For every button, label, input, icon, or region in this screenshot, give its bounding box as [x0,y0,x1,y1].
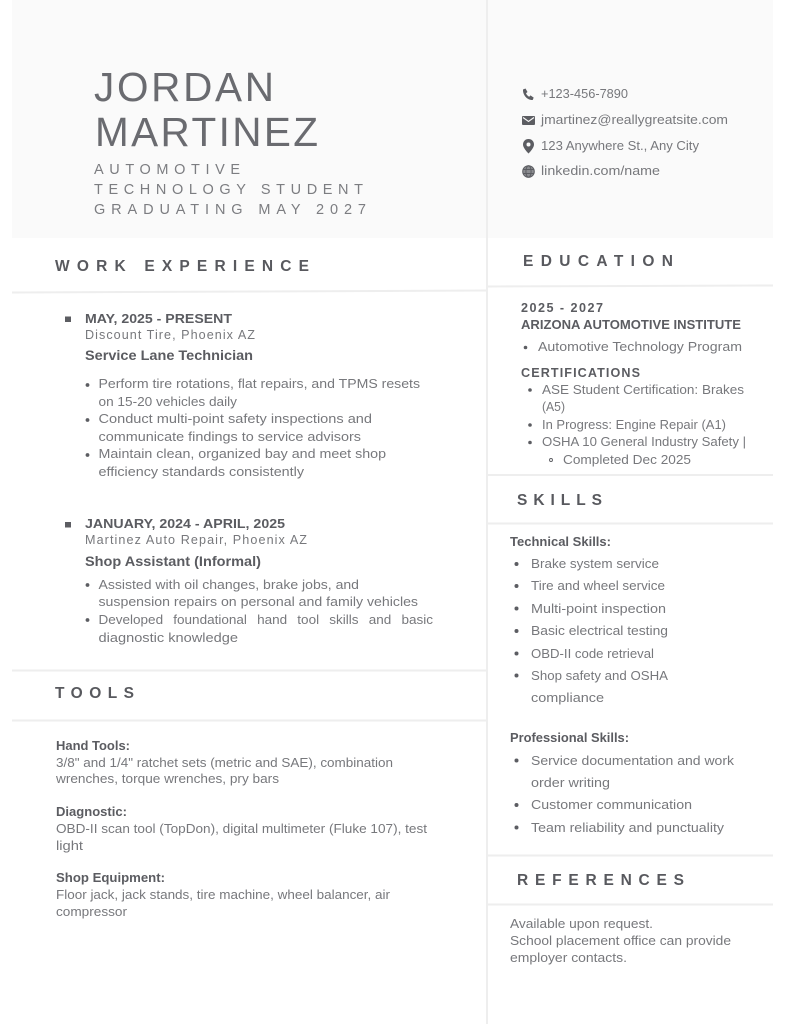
job 1 duties: efficiency standards consistently [98,465,305,479]
heading: tools: TOOLS [55,685,134,702]
shop equipment: Shop Equipment: [56,871,165,885]
subtitle: GRADUATING MAY 2027 [94,202,366,218]
technical skills: Basic electrical testing [531,624,668,638]
icon: globe [523,166,534,177]
technical skills: Shop safety and OSHA [531,669,669,683]
panel: contact [522,86,728,178]
certifications: Completed Dec 2025 [563,453,691,467]
professional skills: Customer communication [531,798,692,812]
hand tools: wrenches, torque wrenches, pry bars [55,772,279,786]
job 1 duties: Perform tire rotations, flat repairs, and TPMS resets [98,377,420,391]
shop equipment [56,871,390,919]
technical skills: OBD-II code retrieval [531,647,654,661]
icon: phone [523,88,534,100]
contact: phone number: +123-456-7890 [541,86,628,101]
icon: mail [522,116,535,125]
hand tools: Hand Tools: [56,739,130,753]
certifications: CERTIFICATIONS [521,366,640,380]
panel: references: Available upon request. [510,917,653,931]
technical skills: Multi-point inspection [531,602,666,616]
job 1 role: Service Lane Technician [85,348,253,363]
job 2 duties [86,578,433,645]
technical skills [510,535,669,705]
diagnostic tools: Diagnostic: [56,805,127,819]
subtitle: TECHNOLOGY STUDENT [94,182,363,198]
title: name [94,64,318,155]
panel: job 2 [65,517,433,645]
job 1 duties: communicate findings to service advisors [98,430,361,444]
job 2 role: Shop Assistant (Informal) [85,554,261,569]
certifications: OSHA 10 General Industry Safety | [542,435,746,449]
diagnostic tools: light [56,839,84,853]
panel: tools [55,739,428,919]
subtitle [94,162,366,218]
diagnostic tools: OBD-II scan tool (TopDon), digital multimeter (Fluke 107), test [56,822,428,836]
hand tools [55,739,393,786]
panel: references: employer contacts. [510,951,627,965]
job 2 dates: JANUARY, 2024 - APRIL, 2025 [85,517,285,531]
panel: references: School placement office can provide [510,934,731,948]
contact: website: linkedin.com/name [541,163,660,178]
technical skills: Tire and wheel service [531,579,665,593]
professional skills: Professional Skills: [510,731,629,745]
job 1 duties [86,377,420,479]
icon: location pin [523,139,534,154]
certifications [521,366,746,467]
job 1 dates: MAY, 2025 - PRESENT [85,312,232,326]
school: 2025 - 2027 [521,301,603,315]
technical skills: Brake system service [531,557,659,571]
contact: email: jmartinez@reallygreatsite.com [540,112,728,127]
panel: skills [510,535,735,835]
job 1 duties: Maintain clean, organized bay and meet shop [98,447,386,461]
professional skills: Team reliability and punctuality [531,821,725,835]
job 2 duties: Developed foundational hand tool skills and basic [98,613,433,627]
certifications: (A5) [542,400,565,414]
heading: skills: SKILLS [517,492,602,509]
certifications: In Progress: Engine Repair (A1) [542,418,726,432]
heading: work experience: WORK EXPERIENCE [55,258,309,275]
shop equipment: Floor jack, jack stands, tire machine, wheel balancer, air [56,888,390,902]
title: name: JORDAN [94,64,274,110]
technical skills: compliance [531,691,604,705]
title: name: MARTINEZ [95,109,318,155]
technical skills: Technical Skills: [510,535,611,549]
job 1 duties: on 15-20 vehicles daily [98,395,238,409]
heading: references: REFERENCES [517,872,684,889]
hand tools: 3/8" and 1/4" ratchet sets (metric and SAE), combination [56,756,393,770]
panel: job 1 [65,312,420,479]
panel: education [521,301,746,467]
contact: address: 123 Anywhere St., Any City [541,138,699,153]
panel: references [510,917,731,965]
header band [12,0,773,238]
bullet marker [65,316,71,322]
job 1 duties: Conduct multi-point safety inspections and [98,412,372,426]
job 2 duties: diagnostic knowledge [98,631,238,645]
shop equipment: compressor [56,905,127,919]
subtitle: AUTOMOTIVE [94,162,240,178]
job 2 duties: Assisted with oil changes, brake jobs, and [98,578,359,592]
heading: education: EDUCATION [523,253,673,270]
bullet marker [65,522,71,528]
school [521,301,742,354]
job 1 employer: Discount Tire, Phoenix AZ [85,328,255,342]
school: Automotive Technology Program [538,340,742,354]
diagnostic tools [56,805,428,853]
school: ARIZONA AUTOMOTIVE INSTITUTE [521,318,741,332]
professional skills: order writing [531,776,610,790]
job 2 duties: suspension repairs on personal and family vehicles [98,595,418,609]
job 2 employer: Martinez Auto Repair, Phoenix AZ [85,533,307,547]
professional skills [510,731,735,835]
certifications: ASE Student Certification: Brakes [542,383,744,397]
professional skills: Service documentation and work [531,754,735,768]
